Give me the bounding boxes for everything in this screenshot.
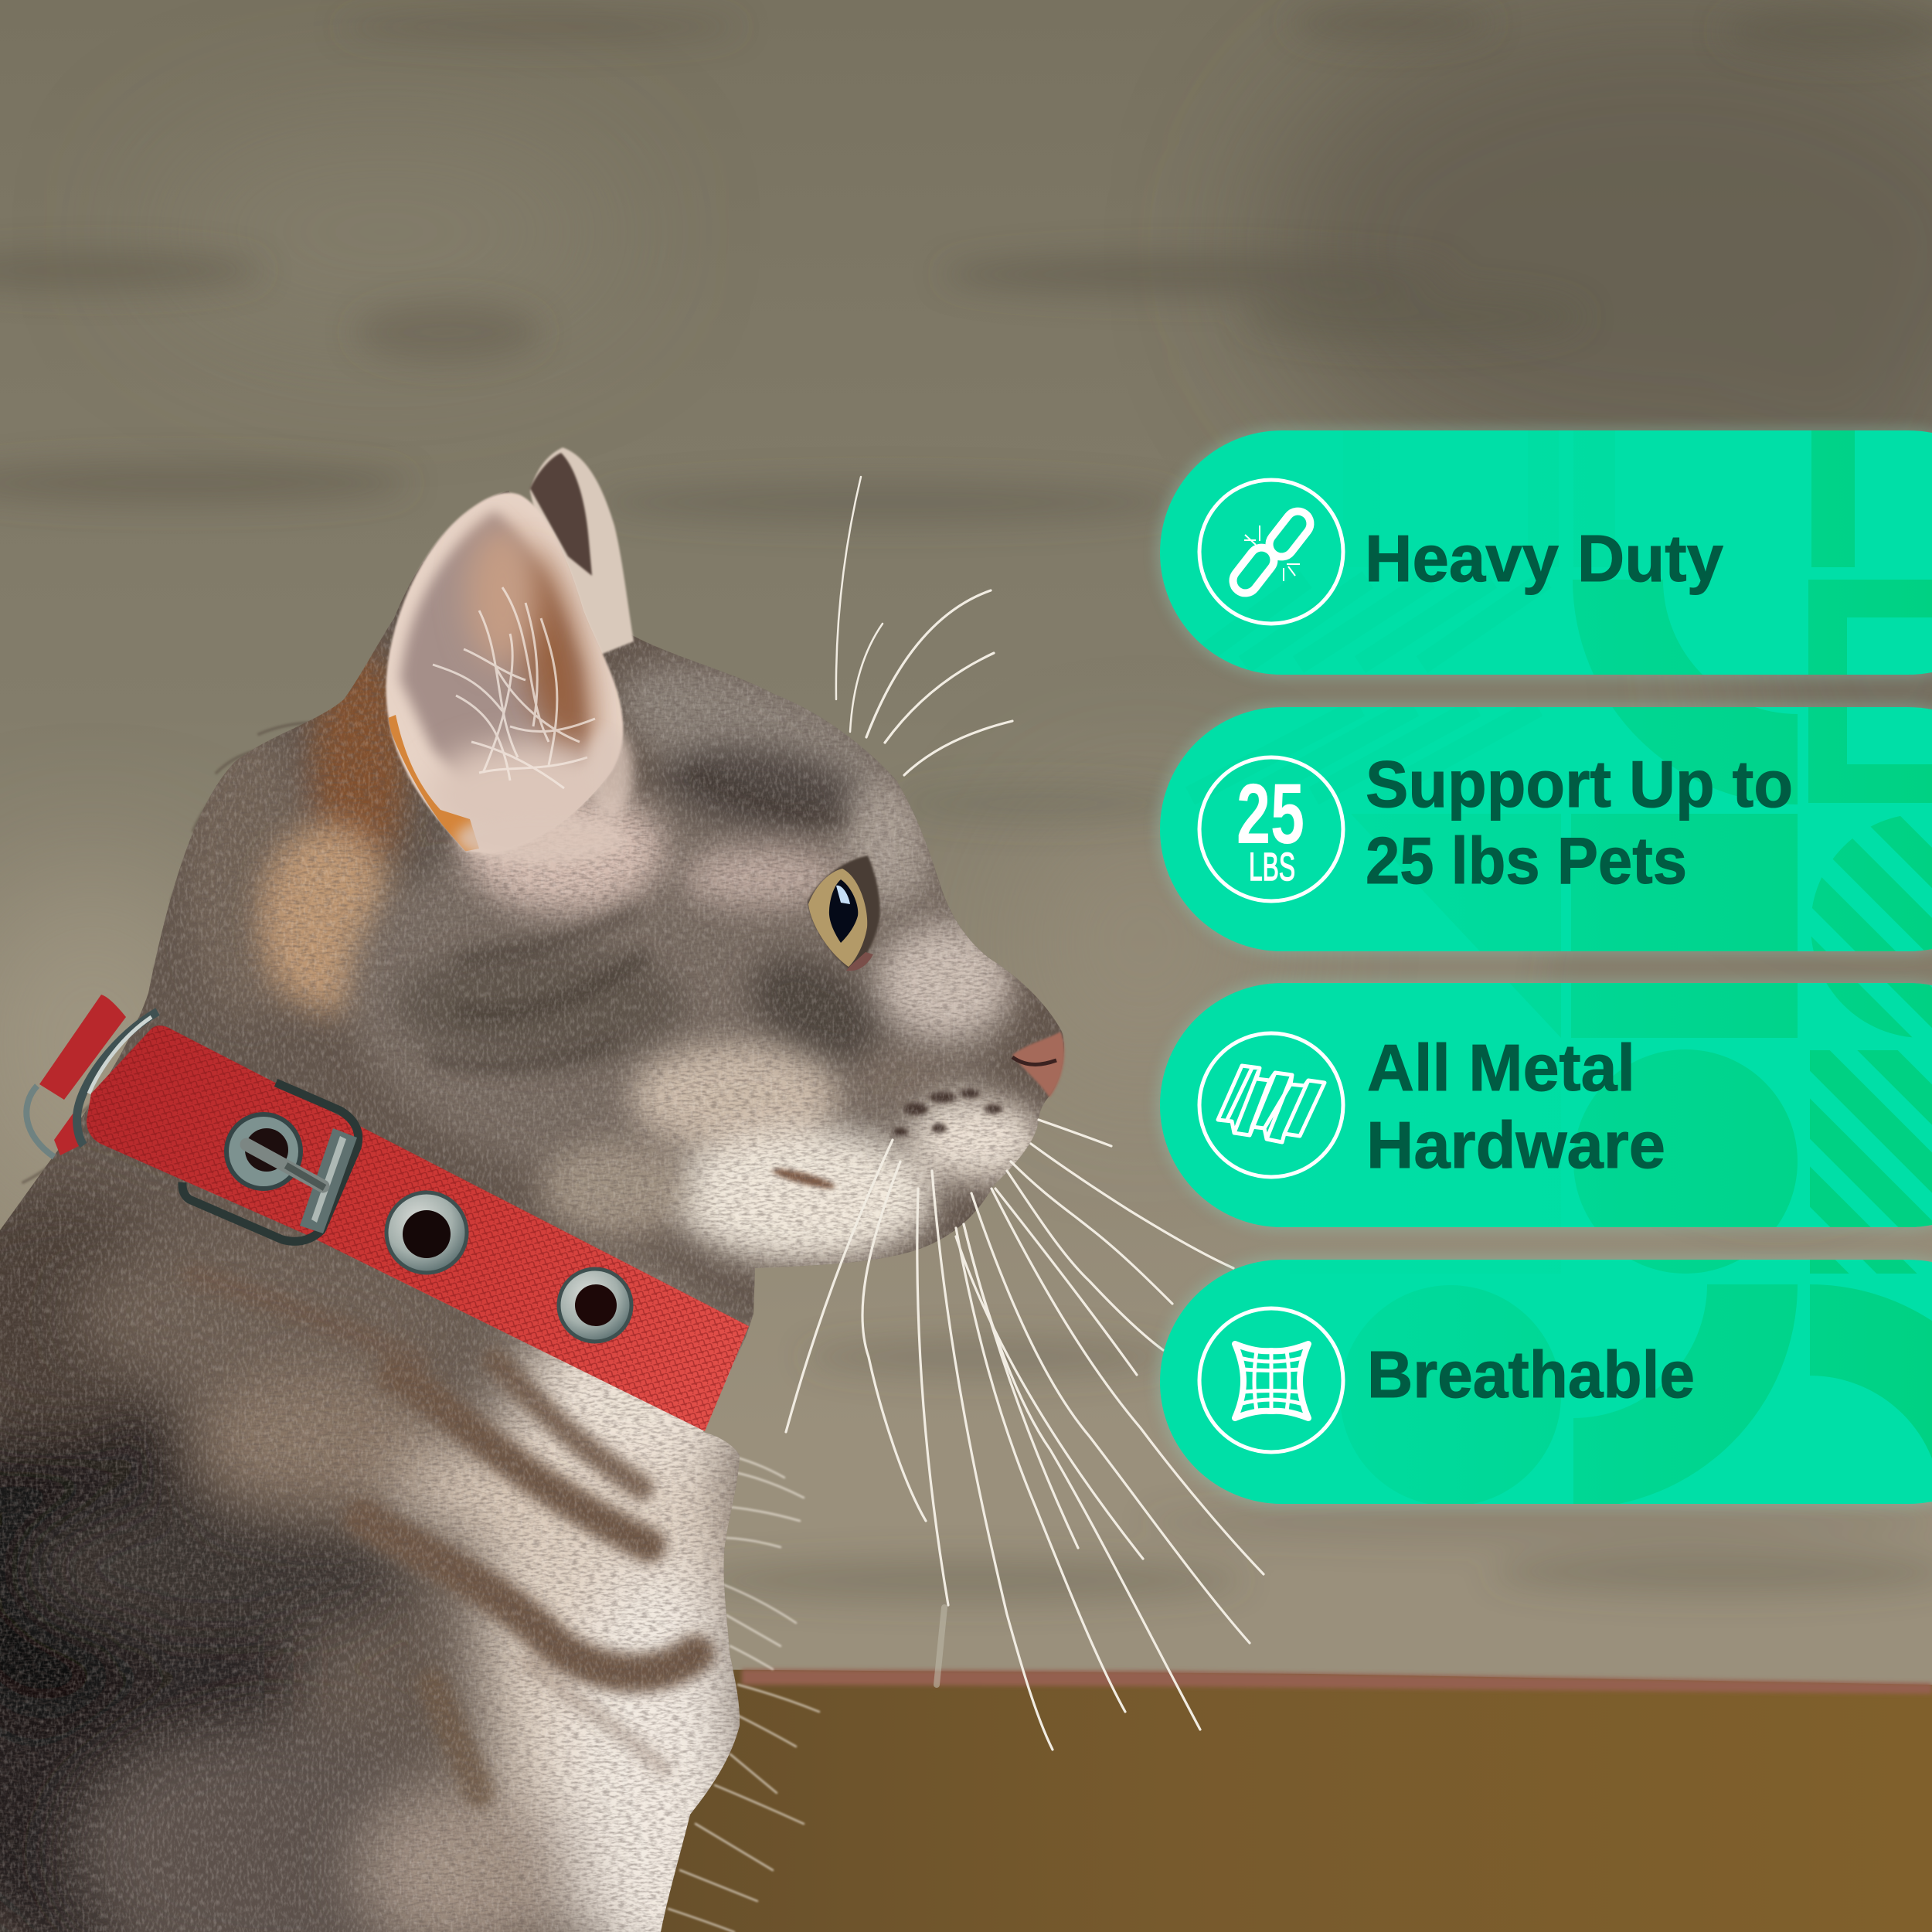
red collar	[26, 995, 749, 1431]
panel: weight support	[1160, 335, 1932, 1532]
icon: chain link	[1199, 480, 1343, 624]
back ear	[530, 447, 634, 657]
cat body and head	[0, 433, 1082, 1932]
text: support up to 25 lbs pets: Support Up to	[1366, 748, 1793, 821]
panel: all metal hardware	[1160, 335, 1932, 1532]
head shading	[348, 630, 1043, 1264]
collar back tab	[39, 995, 126, 1155]
icon: 25 lbs: LBS	[1249, 845, 1295, 889]
collar D ring	[77, 1012, 158, 1145]
text: all metal hardware: All Metal	[1367, 1032, 1635, 1105]
eye	[808, 855, 880, 971]
collar ring far	[26, 1086, 54, 1157]
body shading	[0, 1190, 757, 1932]
icon: breathable mesh	[1199, 1308, 1343, 1452]
icon: 25 lbs	[1199, 757, 1343, 901]
text: support up to 25 lbs pets	[1366, 748, 1793, 898]
panel: breathable	[1160, 335, 1932, 1532]
chest stripes	[193, 1275, 696, 1793]
buckle	[182, 1083, 359, 1241]
panel: heavy duty	[1160, 335, 1932, 1532]
heading: Heavy Duty: Heavy Duty	[1365, 522, 1723, 596]
fur texture	[0, 433, 1082, 1932]
text: support up to 25 lbs pets: 25 lbs Pets	[1366, 825, 1687, 898]
text: all metal hardware	[1366, 1032, 1665, 1182]
heading: Breathable: Breathable	[1367, 1338, 1695, 1412]
pill glow	[1155, 426, 1932, 1509]
nose	[1012, 1032, 1064, 1097]
grommet one	[226, 1114, 301, 1189]
chest fur wisps	[668, 1457, 819, 1932]
text: all metal hardware: Hardware	[1366, 1109, 1665, 1182]
icon: metal sheet	[1199, 1033, 1343, 1177]
grommet two	[386, 1192, 467, 1273]
front ear	[386, 493, 626, 854]
neck fur fringe	[23, 723, 317, 1182]
grommet three	[559, 1269, 631, 1342]
ear base fur	[456, 726, 634, 865]
whiskers	[786, 477, 1264, 1750]
icon: 25 lbs: 25	[1236, 767, 1304, 862]
collar band	[87, 1026, 749, 1431]
muzzle marks	[771, 1089, 1002, 1192]
mane behind ear	[187, 649, 436, 1029]
neck streaks	[433, 773, 842, 1066]
floor and skirting line	[657, 1669, 1932, 1932]
